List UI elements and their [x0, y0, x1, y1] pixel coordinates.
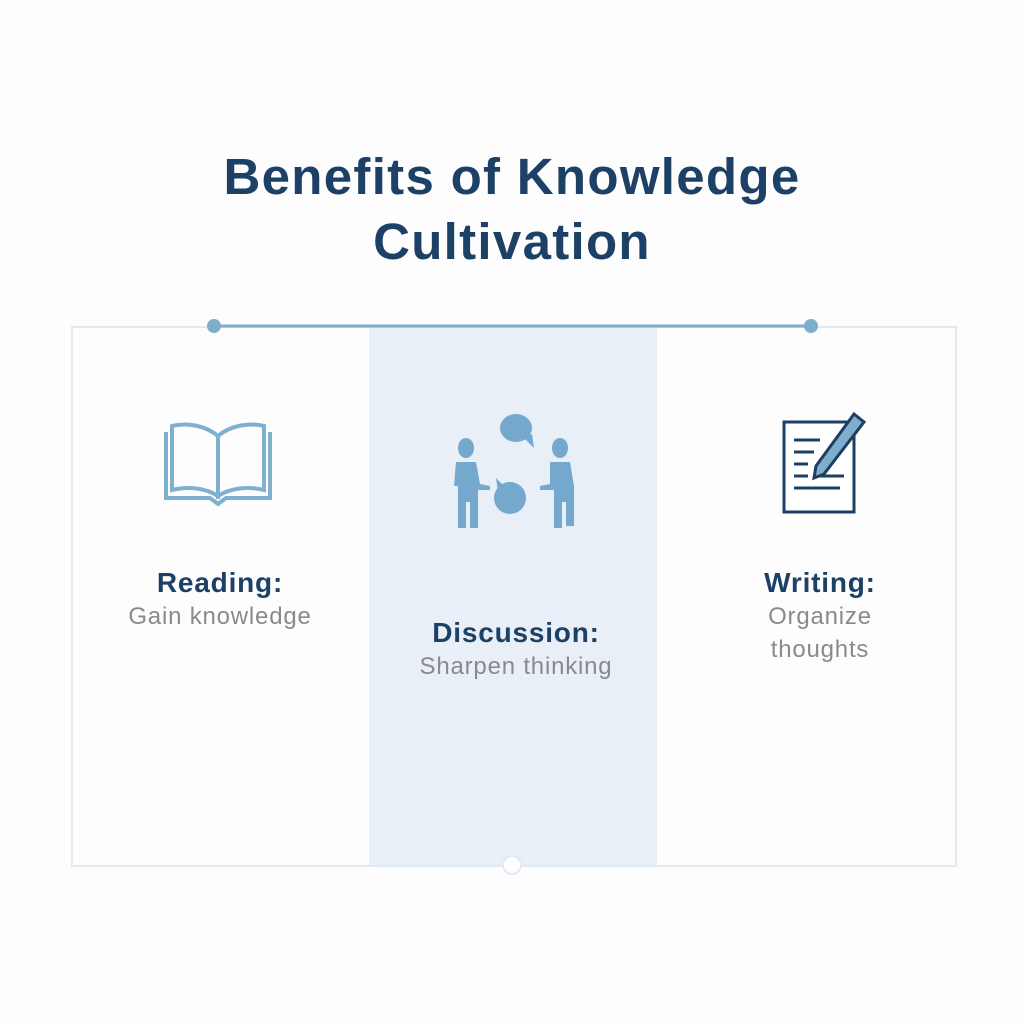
title: Cultivation: [373, 213, 651, 270]
icon: document with pencil: [782, 412, 866, 514]
text: writing: Writing:: [764, 567, 876, 598]
icon: discussion: [454, 414, 574, 528]
text: reading: Reading:: [157, 567, 283, 598]
text: discussion: Sharpen thinking: [420, 653, 612, 680]
title: Benefits of Knowledge: [224, 148, 800, 205]
text: reading: Gain knowledge: [128, 603, 312, 630]
text: discussion: [420, 617, 612, 680]
text: writing: thoughts: [771, 636, 869, 663]
icon: open book: [164, 422, 272, 506]
panel frame: [71, 326, 957, 867]
title: [224, 148, 800, 270]
text: writing: [764, 567, 876, 663]
text: discussion: Discussion:: [432, 617, 600, 648]
text: writing: Organize: [768, 603, 872, 630]
panel: discussion background: [369, 328, 657, 865]
text: reading: [128, 567, 312, 630]
